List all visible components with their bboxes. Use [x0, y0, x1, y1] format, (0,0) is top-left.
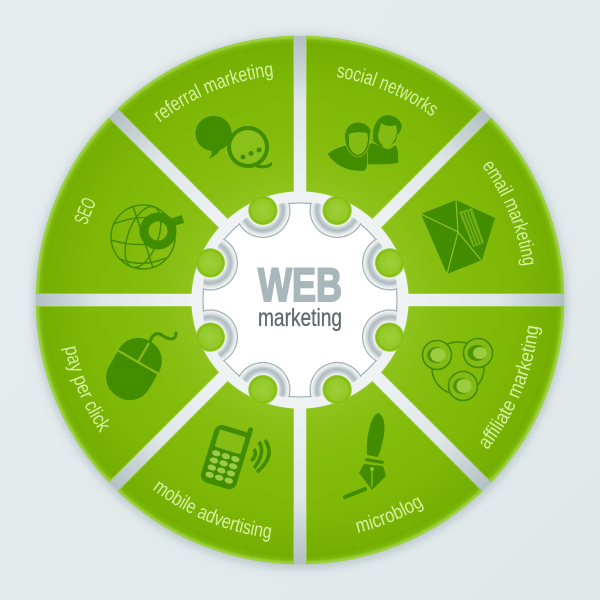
label: pay per click: [61, 346, 110, 433]
icon: envelope: [421, 200, 495, 274]
panel: social networks: [306, 36, 482, 226]
icon: computer mouse: [97, 329, 176, 409]
icon: two people: [327, 115, 402, 171]
title: WEB: WEB: [258, 258, 342, 311]
disc shadow: [34, 36, 566, 568]
panel: mobile advertising: [118, 374, 294, 564]
label: email marketing: [484, 162, 534, 266]
label: mobile advertising: [153, 481, 272, 542]
icon: speech bubbles: [195, 116, 272, 168]
panel: SEO: [36, 117, 226, 294]
label: social networks: [337, 66, 437, 116]
disc base with dividers: [36, 36, 564, 564]
panel: referral marketing: [118, 36, 294, 226]
central gear: [202, 202, 398, 398]
panel: microblog: [306, 374, 482, 564]
panel: affiliate marketing: [374, 306, 564, 483]
panel: pay per click: [36, 306, 226, 483]
panel: email marketing: [374, 117, 564, 294]
label: SEO: [74, 198, 95, 224]
icon: fountain pen: [345, 413, 386, 497]
subtitle: marketing: marketing: [258, 304, 342, 332]
label: referral marketing: [154, 64, 273, 122]
label: microblog: [356, 496, 424, 533]
icon: globe and magnifier: [111, 202, 183, 272]
title: [258, 258, 342, 332]
icon: mobile phone: [199, 417, 269, 491]
label: affiliate marketing: [480, 326, 542, 449]
icon: network of three: [422, 338, 492, 400]
